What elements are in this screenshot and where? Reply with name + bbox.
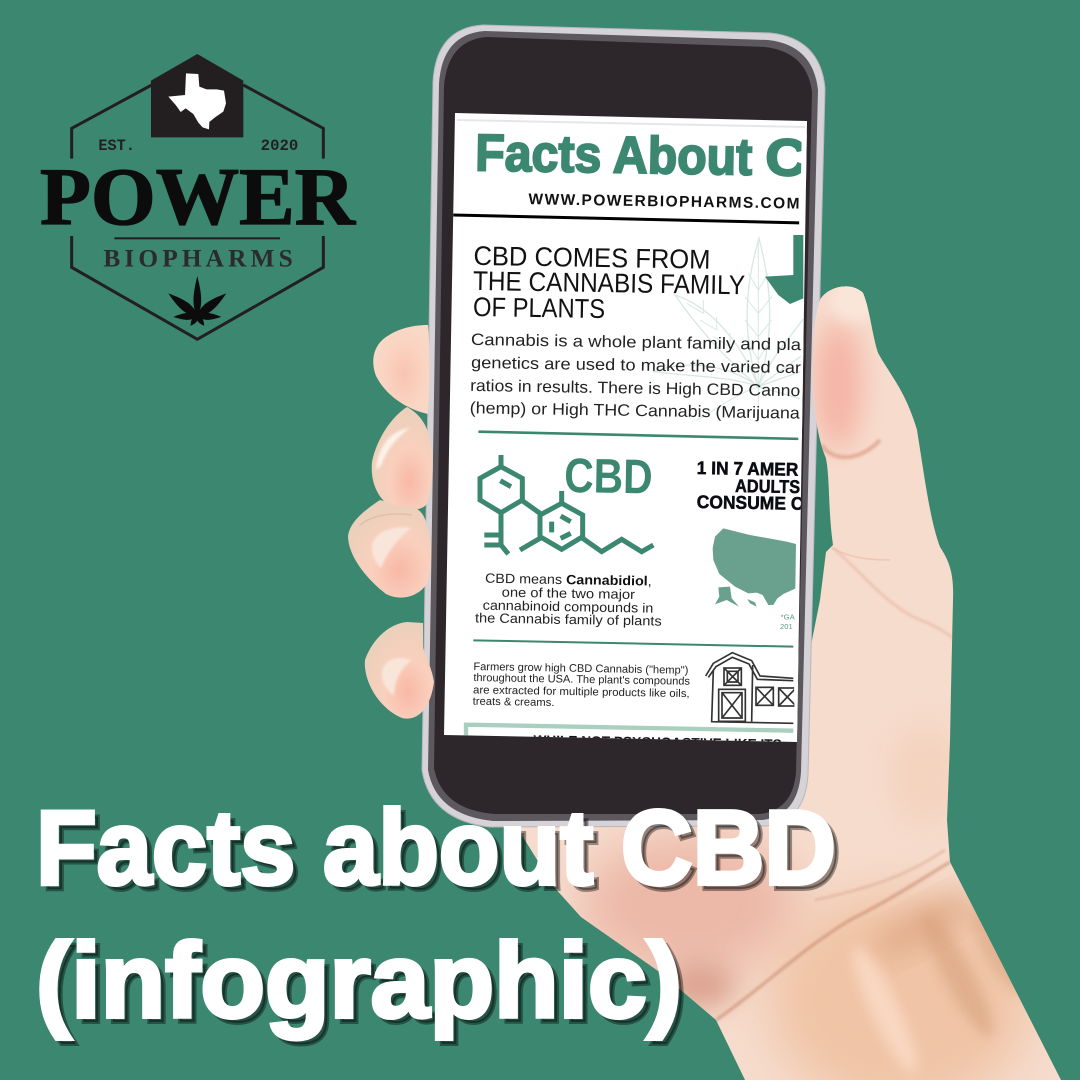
- title line two shadow: (infographic): [41, 927, 687, 1045]
- infographic title: CBD: [765, 129, 891, 189]
- farmers text: treats & creams.: [473, 696, 554, 709]
- heading: CBD comes from: [474, 246, 745, 318]
- phone body: [422, 25, 825, 827]
- main title: [36, 789, 841, 1045]
- divider: [473, 640, 793, 647]
- body paragraph: [470, 331, 802, 423]
- farmers text: Farmers grow high CBD Cannabis ("hemp"): [473, 661, 688, 677]
- logo year text: 2020: [261, 137, 298, 155]
- map source note: [780, 614, 795, 629]
- farmers text: throughout the USA. The plant's compounds: [473, 672, 691, 688]
- screen text layer: [453, 134, 807, 440]
- title line one: Facts about CBD: [36, 789, 836, 907]
- header rule: [453, 215, 799, 223]
- screen top rule: [457, 120, 805, 127]
- CBD label: CBD: [564, 449, 653, 505]
- logo est text: EST.: [98, 137, 135, 155]
- heading: CBD comes from: THE CANNABIS FAMILY: [473, 266, 745, 300]
- CBD definition: CBD means Cannabidiol,: [485, 571, 652, 589]
- logo hexagon frame: [72, 85, 323, 339]
- CBD definition: one of the two major: [502, 585, 636, 602]
- phone screen content: [453, 119, 807, 742]
- callout box heading: WHILE NOT PSYCHOACTIVE LIKE ITS: [533, 733, 782, 751]
- infographic title: [477, 134, 806, 177]
- finger three: [348, 500, 431, 598]
- white mask past title edge: [801, 134, 807, 186]
- CBD definition: cannabinoid compounds in: [483, 598, 654, 616]
- USA map: [713, 528, 796, 607]
- molecule icon: [480, 455, 653, 554]
- farmers text: are extracted for multiple products like oils,: [473, 684, 690, 700]
- map source note: 201: [780, 622, 793, 631]
- heading: CBD comes from: OF PLANTS: [473, 292, 605, 324]
- phone dark rim: [428, 31, 818, 821]
- body paragraph: genetics are used to make the varied car: [471, 354, 802, 377]
- callout box edge: [464, 722, 794, 736]
- barn icon: [706, 653, 796, 723]
- phone screen white: [444, 113, 807, 742]
- finger one: [373, 325, 430, 414]
- logo cannabis leaf: [165, 276, 229, 327]
- body paragraph: Cannabis is a whole plant family and pla: [471, 331, 802, 354]
- heading: CBD comes from: CBD COMES FROM: [473, 241, 711, 275]
- white mask right of body: [800, 340, 804, 439]
- Texas watermark: [765, 235, 803, 304]
- fingers on phone edge: [348, 325, 434, 719]
- divider: [478, 432, 798, 439]
- phone black front: [434, 37, 812, 814]
- adults statistic heading: CONSUME C: [697, 491, 804, 514]
- finger four: [365, 622, 434, 719]
- logo: Power Biopharms: [40, 54, 356, 339]
- logo wordmark POWER: POWER: [40, 151, 356, 242]
- logo house with Texas: [151, 54, 243, 137]
- map source note: *GA: [781, 612, 796, 621]
- title line two: (infographic): [36, 922, 682, 1040]
- logo wordmark BIOPHARMS: BIOPHARMS: [103, 245, 293, 273]
- phone silver bezel: [422, 25, 825, 827]
- white mask right of drawings: [793, 643, 799, 730]
- adults statistic heading: [697, 461, 801, 510]
- hand: thumb over phone: [812, 286, 917, 464]
- CBD definition: [475, 571, 662, 629]
- cannabis leaf watermark: [653, 238, 805, 420]
- body paragraph: (hemp) or High THC Cannabis (Marijuana: [470, 399, 801, 423]
- website url: WWW.POWERBIOPHARMS.COM: [528, 191, 800, 213]
- hand: palm and wrist: [521, 286, 1061, 1080]
- finger two: [372, 407, 433, 510]
- CBD definition: the Cannabis family of plants: [475, 610, 662, 629]
- logo divider: [114, 237, 280, 239]
- title line one shadow: Facts about CBD: [41, 794, 841, 912]
- farmers text: [473, 661, 691, 709]
- infographic title: Facts About: [475, 124, 753, 187]
- lower screen drawings: [466, 449, 808, 751]
- body paragraph: ratios in results. There is High CBD Canno: [470, 377, 800, 400]
- adults statistic heading: 1 IN 7 AMER: [697, 457, 799, 480]
- adults statistic heading: ADULTS: [735, 475, 800, 497]
